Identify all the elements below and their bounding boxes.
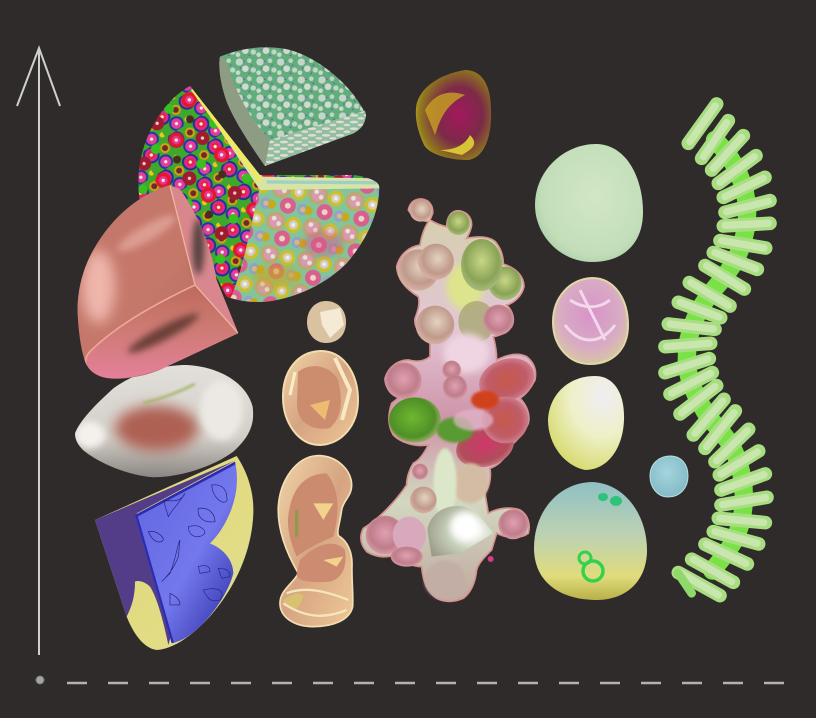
spring inner core <box>687 140 747 571</box>
form: pink glass pebble <box>553 278 628 364</box>
form: small teal pebble <box>650 456 688 497</box>
form: yellow and white pebble <box>548 376 624 470</box>
form: speckled green quarter sphere <box>219 47 366 166</box>
form: gold liquid pebble <box>283 351 358 445</box>
blue face with cell outlines <box>133 460 240 647</box>
bubble column silhouette <box>361 199 536 602</box>
spring end cap <box>678 573 692 593</box>
spring coil highlights <box>667 106 768 595</box>
middle bubbles <box>385 351 540 474</box>
form: pale green egg <box>535 144 643 262</box>
form: iridescent bubble column <box>361 199 540 602</box>
upper bubbles <box>398 200 522 373</box>
form: salmon pink glossy wedge <box>78 185 238 379</box>
purple top and side faces <box>95 461 235 645</box>
form: gold twisted blob <box>278 456 353 627</box>
horizontal dashed axis <box>67 682 786 684</box>
form: white stone with red band <box>75 365 254 478</box>
vertical axis with arrow <box>17 48 60 655</box>
form: magenta gold gem <box>416 70 491 160</box>
form: teal and yellow egg with green marks <box>534 482 647 600</box>
form: blue and yellow wedge <box>95 456 253 650</box>
axis origin dot <box>36 676 44 684</box>
form: small pearl gold pebble <box>307 301 346 343</box>
form: colourful rosette sphere section <box>133 80 387 307</box>
spring front coils <box>665 104 770 596</box>
form: green coiled spring <box>665 104 770 596</box>
lower bubbles <box>366 448 528 599</box>
